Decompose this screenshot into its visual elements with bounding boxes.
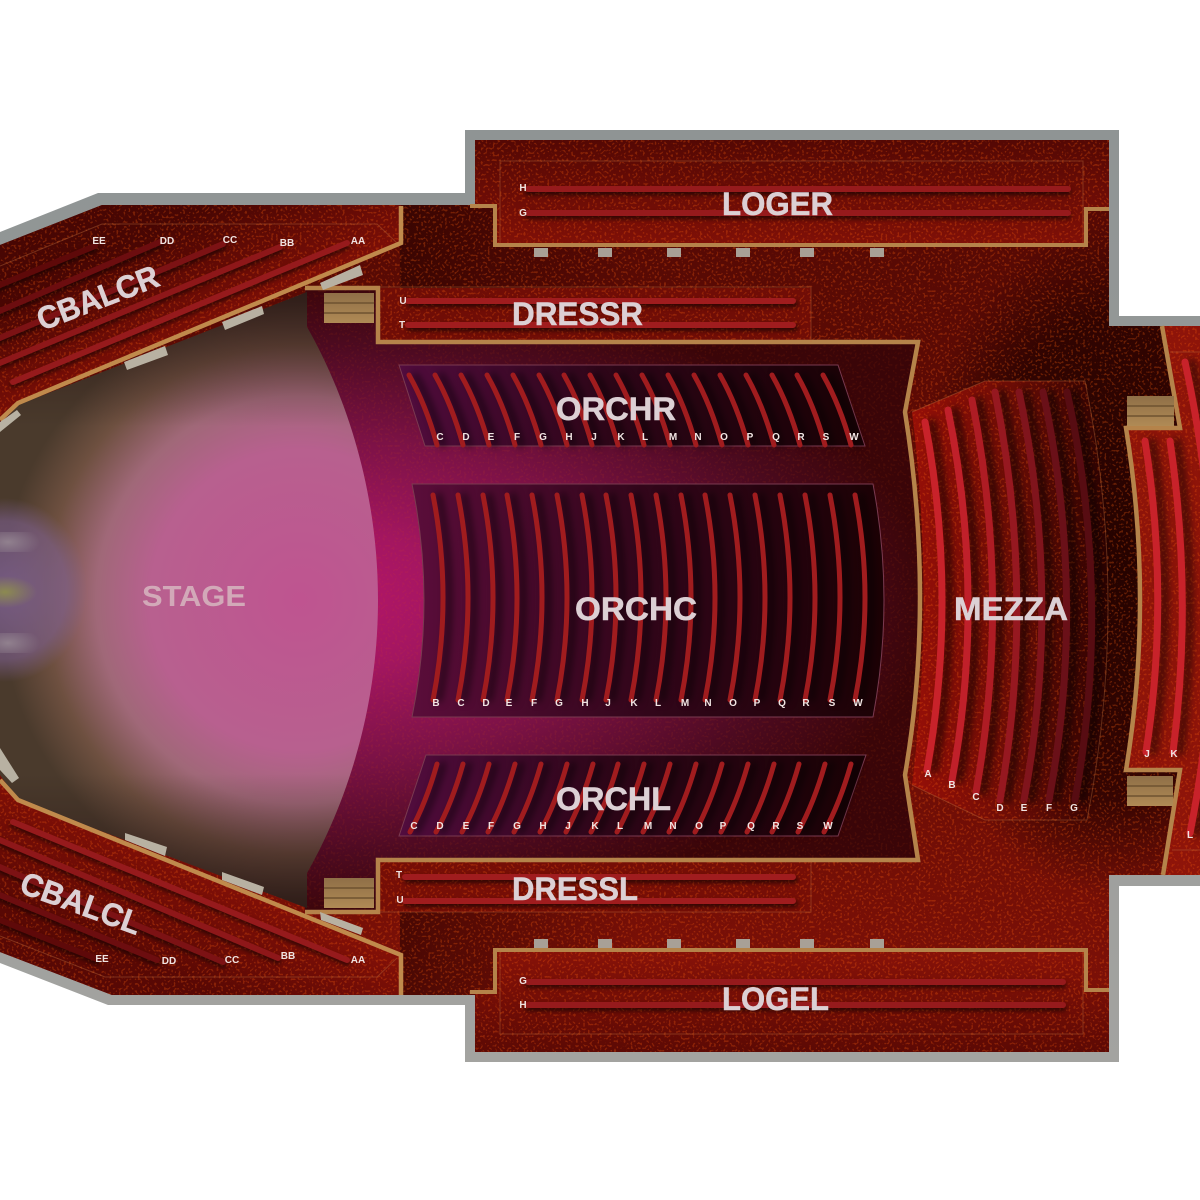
section: ORCHL: [399, 755, 866, 836]
LOGEL row letters: [519, 976, 527, 1011]
rear row letters: [1144, 749, 1193, 841]
tan railing: left balcony: [0, 780, 401, 995]
MEZZA row letters: G: [1070, 803, 1078, 814]
CBALCL row letters: AA: [351, 955, 365, 966]
section: LOGEL: [519, 976, 1063, 1017]
ORCHL row letters: S: [797, 821, 804, 832]
ORCHL row letters: Q: [747, 821, 755, 832]
CBALCR row letters: BB: [280, 238, 294, 249]
DRESSR row letters: U: [399, 296, 407, 307]
CBALCR row letters: [92, 235, 365, 249]
ORCHL row letters: R: [772, 821, 780, 832]
ORCHR row letters: H: [565, 432, 573, 443]
ORCHC row letters: R: [802, 698, 810, 709]
tan railing: right loge: [470, 206, 1109, 245]
stairs: upper stage left: [324, 293, 374, 323]
ORCHC row letters: [432, 698, 863, 709]
tan railing: orchestra and dress circle: [305, 288, 920, 912]
ORCHR label: ORCHR: [556, 391, 676, 427]
panel: right rear section: [1126, 326, 1200, 875]
ORCHC row letters: W: [853, 698, 863, 709]
ORCHL row letters: K: [591, 821, 599, 832]
ORCHL label: ORCHL: [556, 781, 671, 817]
section: CBALCL: [0, 822, 365, 967]
LOGEL label: LOGEL: [722, 981, 829, 1017]
stage: [0, 280, 400, 920]
ORCHC row letters: S: [829, 698, 836, 709]
building wall outline: [0, 130, 1200, 1062]
ORCHC row letters: O: [729, 698, 737, 709]
ORCHC label: ORCHC: [575, 591, 697, 627]
ORCHL seat rows: [410, 764, 851, 832]
ORCHL row letters: D: [436, 821, 444, 832]
loge fascia blocks: [534, 248, 884, 948]
panel: left balcony floor: [0, 780, 401, 995]
panel: mezzanine section: [912, 381, 1108, 820]
CBALCL row letters: EE: [95, 954, 109, 965]
CBALCR row letters: DD: [160, 236, 174, 247]
DRESSR seat rows: [408, 301, 793, 325]
ORCHR row letters: W: [849, 432, 859, 443]
DRESSR row letters: [399, 296, 407, 331]
ORCHC row letters: K: [630, 698, 638, 709]
LOGER row letters: H: [519, 183, 527, 194]
CBALCL row letters: CC: [225, 955, 239, 966]
ORCHC row letters: P: [754, 698, 761, 709]
LOGEL row letters: H: [519, 1000, 527, 1011]
ORCHL row letters: H: [539, 821, 547, 832]
floor speckle texture: [0, 130, 1200, 1070]
CBALCL row letters: BB: [281, 951, 295, 962]
panel: upper right loge floor: [475, 140, 1109, 245]
rear row letters: L: [1187, 830, 1193, 841]
DRESSL seat rows: [405, 877, 793, 901]
tan railing: left loge: [470, 950, 1109, 992]
CBALCR row letters: EE: [92, 236, 106, 247]
MEZZA row letters: D: [996, 803, 1004, 814]
ORCHR row letters: F: [514, 432, 520, 443]
ORCHR row letters: N: [694, 432, 702, 443]
stage label: STAGE: [142, 581, 246, 613]
MEZZA row letters: E: [1021, 803, 1028, 814]
stairs: lower stage left: [324, 878, 374, 908]
ORCHR row letters: P: [747, 432, 754, 443]
panel: right balcony floor: [0, 205, 401, 420]
MEZZA seat rows: [925, 392, 1092, 800]
ORCHC row letters: C: [457, 698, 465, 709]
ORCHR row letters: Q: [772, 432, 780, 443]
ORCHR row letters: O: [720, 432, 728, 443]
ORCHR row letters: D: [462, 432, 470, 443]
CBALCL row letters: [95, 951, 365, 967]
orchestra floor texture: [300, 285, 925, 915]
panel: right dress circle floor: [378, 288, 811, 342]
ORCHC row letters: B: [432, 698, 440, 709]
panel: lower left loge floor: [475, 950, 1109, 1052]
ORCHR row letters: S: [823, 432, 830, 443]
ORCHL row letters: E: [463, 821, 470, 832]
section: DRESSR: [399, 296, 793, 332]
LOGER row letters: G: [519, 208, 527, 219]
MEZZA row letters: A: [924, 769, 932, 780]
ORCHR seat rows: [409, 375, 851, 445]
LOGER label: LOGER: [722, 186, 833, 222]
LOGER seat rows: [528, 189, 1068, 213]
CBALCR label: CBALCR: [32, 258, 164, 338]
ORCHR row letters: [436, 432, 859, 443]
ORCHC seat rows: [433, 495, 865, 700]
DRESSR label: DRESSR: [512, 296, 643, 332]
section: ORCHR: [399, 365, 865, 446]
ORCHR row letters: K: [617, 432, 625, 443]
ORCHL row letters: M: [644, 821, 652, 832]
CBALCL label: CBALCL: [16, 865, 146, 942]
ORCHC row letters: Q: [778, 698, 786, 709]
ORCHC row letters: F: [531, 698, 537, 709]
DRESSR row letters: T: [399, 320, 405, 331]
ORCHL row letters: W: [823, 821, 833, 832]
ORCHR row letters: E: [488, 432, 495, 443]
DRESSL row letters: [396, 870, 404, 906]
ORCHL row letters: C: [410, 821, 418, 832]
stairs: rear upper: [1127, 396, 1174, 426]
ORCHC row letters: H: [581, 698, 589, 709]
LOGEL seat rows: [528, 982, 1063, 1005]
ORCHR row letters: G: [539, 432, 547, 443]
ORCHR row letters: M: [669, 432, 677, 443]
tan railing: right balcony: [0, 206, 401, 420]
MEZZA row letters: [924, 769, 1078, 814]
section: ORCHC: [412, 484, 884, 717]
MEZZA label: MEZZA: [954, 591, 1068, 627]
ORCHC row letters: G: [555, 698, 563, 709]
section: DRESSL: [396, 870, 793, 907]
ORCHR row letters: L: [642, 432, 648, 443]
MEZZA row letters: C: [972, 792, 980, 803]
MEZZA row letters: F: [1046, 803, 1052, 814]
LOGER row letters: [519, 183, 527, 219]
ORCHL row letters: G: [513, 821, 521, 832]
CBALCR seat rows: [0, 242, 347, 382]
tan railing: rear section: [1126, 326, 1180, 875]
section: rear seating: [1144, 362, 1200, 841]
stairs: rear lower: [1127, 776, 1173, 806]
section: LOGER: [519, 183, 1068, 222]
rear row letters: J: [1144, 749, 1150, 760]
section: MEZZA: [924, 392, 1092, 814]
ORCHC row letters: J: [605, 698, 611, 709]
ORCHC row letters: L: [655, 698, 661, 709]
ORCHL row letters: N: [669, 821, 677, 832]
ORCHL row letters: F: [488, 821, 494, 832]
rear seat rows: [1145, 362, 1200, 833]
ORCHL row letters: L: [617, 821, 623, 832]
ORCHC row letters: D: [482, 698, 490, 709]
ORCHC row letters: N: [704, 698, 712, 709]
MEZZA row letters: B: [948, 780, 956, 791]
CBALCL row letters: DD: [162, 956, 176, 967]
panel: orchestra floor: [305, 288, 920, 912]
ORCHR row letters: C: [436, 432, 444, 443]
section outlines: [0, 161, 1200, 1034]
panel: left dress circle floor: [378, 860, 811, 912]
ORCHL row letters: [410, 821, 833, 832]
CBALCR row letters: AA: [351, 236, 365, 247]
ORCHR row letters: J: [591, 432, 597, 443]
CBALCL seat rows: [0, 822, 347, 962]
ORCHC row letters: E: [506, 698, 513, 709]
balcony fascia blocks: [0, 265, 363, 935]
ORCHC row letters: M: [681, 698, 689, 709]
CBALCR row letters: CC: [223, 235, 237, 246]
ORCHR row letters: R: [797, 432, 805, 443]
DRESSL label: DRESSL: [512, 871, 638, 907]
auditorium floor: [0, 205, 1178, 995]
DRESSL row letters: U: [396, 895, 404, 906]
ORCHL row letters: O: [695, 821, 703, 832]
ORCHL row letters: P: [720, 821, 727, 832]
ORCHL row letters: J: [565, 821, 571, 832]
section: CBALCR: [0, 235, 365, 382]
LOGEL row letters: G: [519, 976, 527, 987]
rear row letters: K: [1170, 749, 1178, 760]
DRESSL row letters: T: [396, 870, 402, 881]
